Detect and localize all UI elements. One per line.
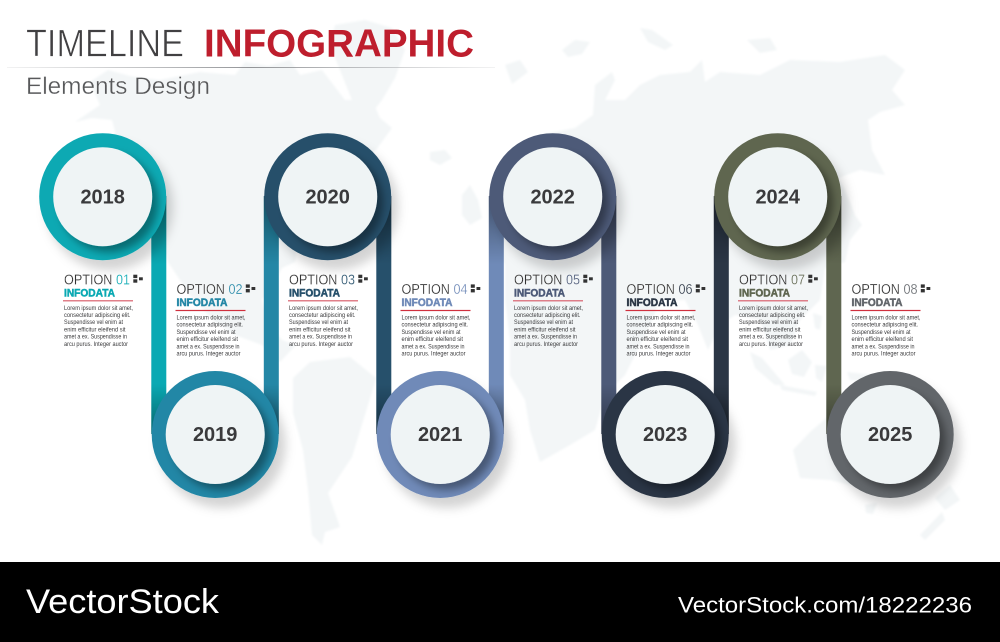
option 04 text block: arcu purus. Integer auctor [402, 350, 466, 358]
option 07 text block: OPTION 07 [739, 272, 805, 288]
option 06 text block: OPTION 06 [626, 282, 692, 298]
option 02 text block: Lorem ipsum dolor sit amet, [176, 314, 246, 322]
option 07 text block: arcu purus. Integer auctor [739, 341, 803, 348]
title [26, 23, 474, 66]
world map background [75, 20, 960, 545]
option 06 text block [626, 282, 705, 358]
option 02 text block: amet a ex. Suspendisse in [176, 343, 240, 350]
year circle 2020 [264, 133, 391, 260]
option 05 text block [513, 272, 593, 348]
option 04 text block [400, 282, 480, 358]
option 02 text block: consectetur adipiscing elit. [176, 322, 243, 329]
option 02 text block: INFODATA [176, 297, 228, 309]
option 01 text block: OPTION 01 [64, 272, 130, 288]
year circle 2018: 2018 [80, 186, 125, 208]
option 01 text block: Lorem ipsum dolor sit amet, [64, 305, 133, 312]
option 08 text block: Lorem ipsum dolor sit amet, [852, 314, 921, 322]
option 08 text block: Suspendisse vel enim at [852, 329, 911, 336]
option 04 text block: consectetur adipiscing elit. [402, 322, 468, 329]
option 04 text block: amet a ex. Suspendisse in [402, 343, 465, 350]
option 04 text block: Lorem ipsum dolor sit amet, [402, 314, 471, 322]
option 06 text block: enim efficitur eleifend sit [626, 336, 688, 343]
year circle 2022 [489, 133, 616, 260]
year circle 2019 [152, 371, 279, 498]
option 05 text block: INFODATA [514, 288, 565, 300]
option 01 text block: INFODATA [64, 288, 115, 300]
footer bar [0, 562, 1000, 642]
option 01 text block: arcu purus. Integer auctor [64, 341, 128, 348]
option 07 text block: Suspendisse vel enim at [739, 319, 798, 326]
title word: infographic: INFOGRAPHIC [204, 23, 474, 66]
year circle 2024: 2024 [755, 186, 801, 208]
option 04 text block: OPTION 04 [402, 282, 468, 298]
title word: timeline: TIMELINE [26, 23, 184, 66]
option 08 text block: enim efficitur eleifend sit [852, 336, 913, 343]
footer logo text: VectorStock [26, 583, 220, 621]
option 03 text block: OPTION 03 [289, 272, 355, 288]
option 05 text block: Suspendisse vel enim at [514, 319, 573, 326]
year circle 2021: 2021 [418, 424, 462, 446]
year circle 2025: 2025 [868, 424, 912, 446]
option 05 text block: enim efficitur eleifend sit [514, 326, 576, 333]
option 03 text block: Suspendisse vel enim at [289, 319, 348, 326]
year circle 2024 [714, 133, 841, 260]
option 06 text block: arcu purus. Integer auctor [626, 350, 690, 358]
option 07 text block: enim efficitur eleifend sit [739, 326, 801, 333]
option 06 text block: Suspendisse vel enim at [626, 329, 686, 336]
option 04 text block: INFODATA [402, 297, 453, 309]
option 06 text block: INFODATA [626, 297, 678, 309]
option 06 text block: consectetur adipiscing elit. [626, 322, 693, 329]
option 04 text block: enim efficitur eleifend sit [402, 336, 463, 343]
option 03 text block: consectetur adipiscing elit. [289, 312, 356, 319]
option 08 text block: arcu purus. Integer auctor [852, 350, 916, 358]
year circle 2023 [602, 371, 729, 498]
option 07 text block: consectetur adipiscing elit. [739, 312, 806, 319]
year circle 2021 [377, 371, 504, 498]
option 08 text block [850, 282, 930, 358]
option 08 text block: consectetur adipiscing elit. [852, 322, 918, 329]
option 02 text block: enim efficitur eleifend sit [176, 336, 238, 343]
option 01 text block: amet a ex. Suspendisse in [64, 334, 127, 341]
option 02 text block: Suspendisse vel enim at [176, 329, 236, 336]
year circle 2020: 2020 [305, 186, 350, 208]
option 07 text block: Lorem ipsum dolor sit amet, [739, 305, 808, 312]
option 02 text block [176, 282, 255, 358]
option 06 text block: amet a ex. Suspendisse in [626, 343, 690, 350]
option 03 text block: INFODATA [289, 288, 340, 300]
option 03 text block: amet a ex. Suspendisse in [289, 334, 352, 341]
option 08 text block: INFODATA [852, 297, 903, 309]
year circle 2019: 2019 [193, 424, 237, 446]
option 07 text block: amet a ex. Suspendisse in [739, 334, 802, 341]
option 01 text block [63, 272, 143, 348]
option 01 text block: Suspendisse vel enim at [64, 319, 123, 326]
option 02 text block: arcu purus. Integer auctor [176, 350, 240, 358]
option 01 text block: consectetur adipiscing elit. [64, 312, 131, 319]
year circle 2018 [39, 133, 166, 260]
footer image id: VectorStock.com/18222236 [678, 593, 972, 618]
option 05 text block: arcu purus. Integer auctor [514, 341, 578, 348]
option 08 text block: amet a ex. Suspendisse in [852, 343, 915, 350]
option 05 text block: amet a ex. Suspendisse in [514, 334, 577, 341]
option 01 text block: enim efficitur eleifend sit [64, 326, 126, 333]
option 08 text block: OPTION 08 [852, 282, 918, 298]
year circle 2025 [827, 371, 954, 498]
option 03 text block [288, 272, 368, 348]
option 05 text block: consectetur adipiscing elit. [514, 312, 581, 319]
option 03 text block: Lorem ipsum dolor sit amet, [289, 305, 358, 312]
option 02 text block: OPTION 02 [176, 282, 242, 298]
connector bars [151, 196, 841, 434]
option 06 text block: Lorem ipsum dolor sit amet, [626, 314, 696, 322]
option 03 text block: enim efficitur eleifend sit [289, 326, 351, 333]
year circle 2023: 2023 [643, 424, 687, 446]
subtitle: Elements Design [26, 73, 210, 100]
option 05 text block: OPTION 05 [514, 272, 580, 288]
option 03 text block: arcu purus. Integer auctor [289, 341, 353, 348]
option 07 text block [738, 272, 818, 348]
option 05 text block: Lorem ipsum dolor sit amet, [514, 305, 583, 312]
option 07 text block: INFODATA [739, 288, 790, 300]
option 04 text block: Suspendisse vel enim at [402, 329, 461, 336]
year circle 2022: 2022 [530, 186, 575, 208]
